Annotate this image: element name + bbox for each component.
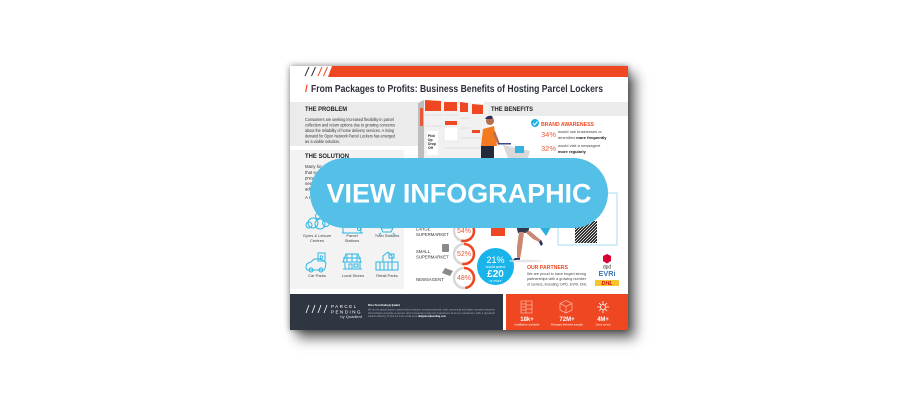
panel: the problem: Consumers are seeking increased flexibility in parcel [305, 117, 394, 122]
chart: donut 54% [454, 221, 474, 241]
logo: dpd: dpd [603, 264, 611, 270]
icons: store types [441, 222, 453, 276]
icon: car parks: P [319, 256, 324, 262]
chart: donut 52% [454, 244, 474, 264]
label: gyms: Gyms & Leisure [303, 233, 331, 238]
button: view infographic [310, 158, 608, 228]
footer: about: PARCEL [331, 304, 358, 309]
chart: donut 54%: 54% [457, 228, 471, 235]
illustration: parcel lockers: Up [428, 138, 433, 142]
QR callout [558, 193, 617, 245]
section: brand awareness: amenities more frequently [558, 135, 607, 140]
logo: DHL [595, 280, 619, 287]
section: brand awareness: BRAND AWARENESS [541, 122, 594, 128]
panel: the solution: THE SOLUTION [305, 154, 349, 160]
section: our partners: OUR PARTNERS [527, 265, 568, 271]
label: parcel stations: Stations [345, 238, 359, 243]
labels: store types [416, 226, 449, 282]
illustration: parcel lockers [418, 100, 488, 160]
icon: local stores [343, 254, 362, 269]
panel: the problem: collection and return options due to growing concerns [305, 122, 395, 128]
label: local stores: Local Stores [342, 273, 364, 278]
panel: benefits header [484, 102, 628, 116]
section: our partners: of carriers, including: DPD, EVRI, DHL [527, 282, 588, 286]
logo: EVRi: EVRi [598, 271, 616, 278]
panel: benefits header: THE BENEFITS [491, 107, 533, 113]
panel: the solution: need [305, 181, 315, 186]
label: gyms: Centres [310, 238, 324, 243]
section: brand awareness: would use businesses or [558, 129, 602, 134]
footer: about: PENDING [331, 310, 362, 314]
footer: stats panel: 18k+ [520, 317, 534, 323]
top banner [305, 66, 628, 77]
icon: car parks [306, 253, 326, 272]
footer: about [290, 294, 503, 330]
panel: the problem: as a viable solution. [305, 139, 340, 144]
chart: donut 52%: 52% [457, 251, 471, 258]
chart: donut 48% [454, 268, 474, 288]
chart: donut 48%: 48% [457, 275, 471, 282]
footer: about: We are the global leader in parcel locker solutions, serving residential, retail, commercial and higher education industries [368, 308, 496, 312]
panel: the solution [290, 150, 404, 289]
illustration: parcel lockers: Off [428, 146, 434, 150]
footer: stats panel [506, 294, 628, 330]
labels: store types: LARGE [416, 226, 431, 232]
section: our partners: partnerships with a growing number [527, 276, 587, 281]
icon: package [560, 300, 572, 313]
section: brand awareness: 32% [541, 144, 556, 153]
icon: retail parks [376, 252, 398, 270]
illustration: parcel lockers: Pick [428, 134, 435, 138]
illustration: parcel lockers: Drop [428, 142, 436, 146]
footer: stats panel: 4M+ [597, 317, 609, 323]
panel: the problem: about the reliability of home delivery services. A rising [305, 128, 395, 133]
panel: the solution: that su [305, 170, 319, 175]
title: / [305, 84, 308, 95]
footer: stats panel: Packages delivered annually [551, 324, 584, 326]
icon: train stations [379, 228, 395, 235]
button: view infographic: VIEW INFOGRAPHIC [326, 178, 592, 208]
label: car parks: Car Parks [308, 273, 326, 278]
panel: the solution: adc [305, 186, 313, 192]
footer: stats panel: Installations worldwide [514, 324, 540, 326]
footer: stats panel: 72M+ [559, 317, 575, 323]
footer: about: Our lockers provide a secure and convenient way for customers and our customers with a dynamic [368, 312, 496, 315]
icon: users [597, 301, 609, 313]
label: parcel stations: Parcel [346, 233, 358, 238]
title: From Packages to Profits: Business Benefits of Hosting Parcel Lockers [311, 84, 603, 95]
labels: store types: SUPERMARKET [416, 232, 449, 237]
logo: dpd [603, 254, 611, 270]
labels: store types: NEWSAGENT [416, 277, 444, 282]
callout: 21% would spend £20: 21% [486, 255, 505, 265]
label: retail parks: Retail Parks [376, 273, 398, 278]
illustration: shopper with trolley [481, 116, 530, 158]
callout: 21% would spend £20: or more [489, 279, 502, 283]
illustration: running woman with bags [491, 225, 552, 262]
icon: parcel stations [342, 227, 363, 233]
footer: about: by Quadient [340, 314, 363, 319]
callout: 21% would spend £20: would spend [486, 265, 505, 269]
icon: gyms and leisure centres [306, 214, 330, 229]
panel: the solution: A rang [305, 195, 318, 200]
panel: the problem: THE PROBLEM [305, 107, 347, 113]
label: train stations: Train Stations [375, 233, 399, 238]
callout: 21% would spend £20 [477, 248, 514, 285]
section: brand awareness: 34% [541, 130, 556, 139]
footer: about: solution offering. To find out more email us at uk@parcelpending.com [368, 315, 447, 318]
footer: stats panel: Users served [596, 324, 611, 326]
section: brand awareness: would visit a newsagent [558, 143, 601, 148]
logo: DHL: DHL [601, 281, 613, 287]
section: our partners [527, 265, 588, 286]
labels: store types: SUPERMARKET [416, 254, 449, 260]
panel: the solution: Many loc [305, 164, 323, 169]
footer: about: Who is Parcel Pending by Quadient [368, 303, 400, 307]
labels: store types: SMALL [416, 249, 431, 254]
panel: the problem: demand for Open Network Parcel Lockers has emerged [305, 134, 396, 138]
panel: the solution: prese [305, 176, 316, 180]
icon: lockers [521, 301, 532, 313]
section: brand awareness [531, 119, 607, 154]
section: our partners: We are proud to have forged strong [527, 271, 586, 276]
section: brand awareness: more regularly [558, 149, 587, 154]
panel: the problem [290, 102, 418, 146]
callout: 21% would spend £20: £20 [487, 269, 504, 280]
